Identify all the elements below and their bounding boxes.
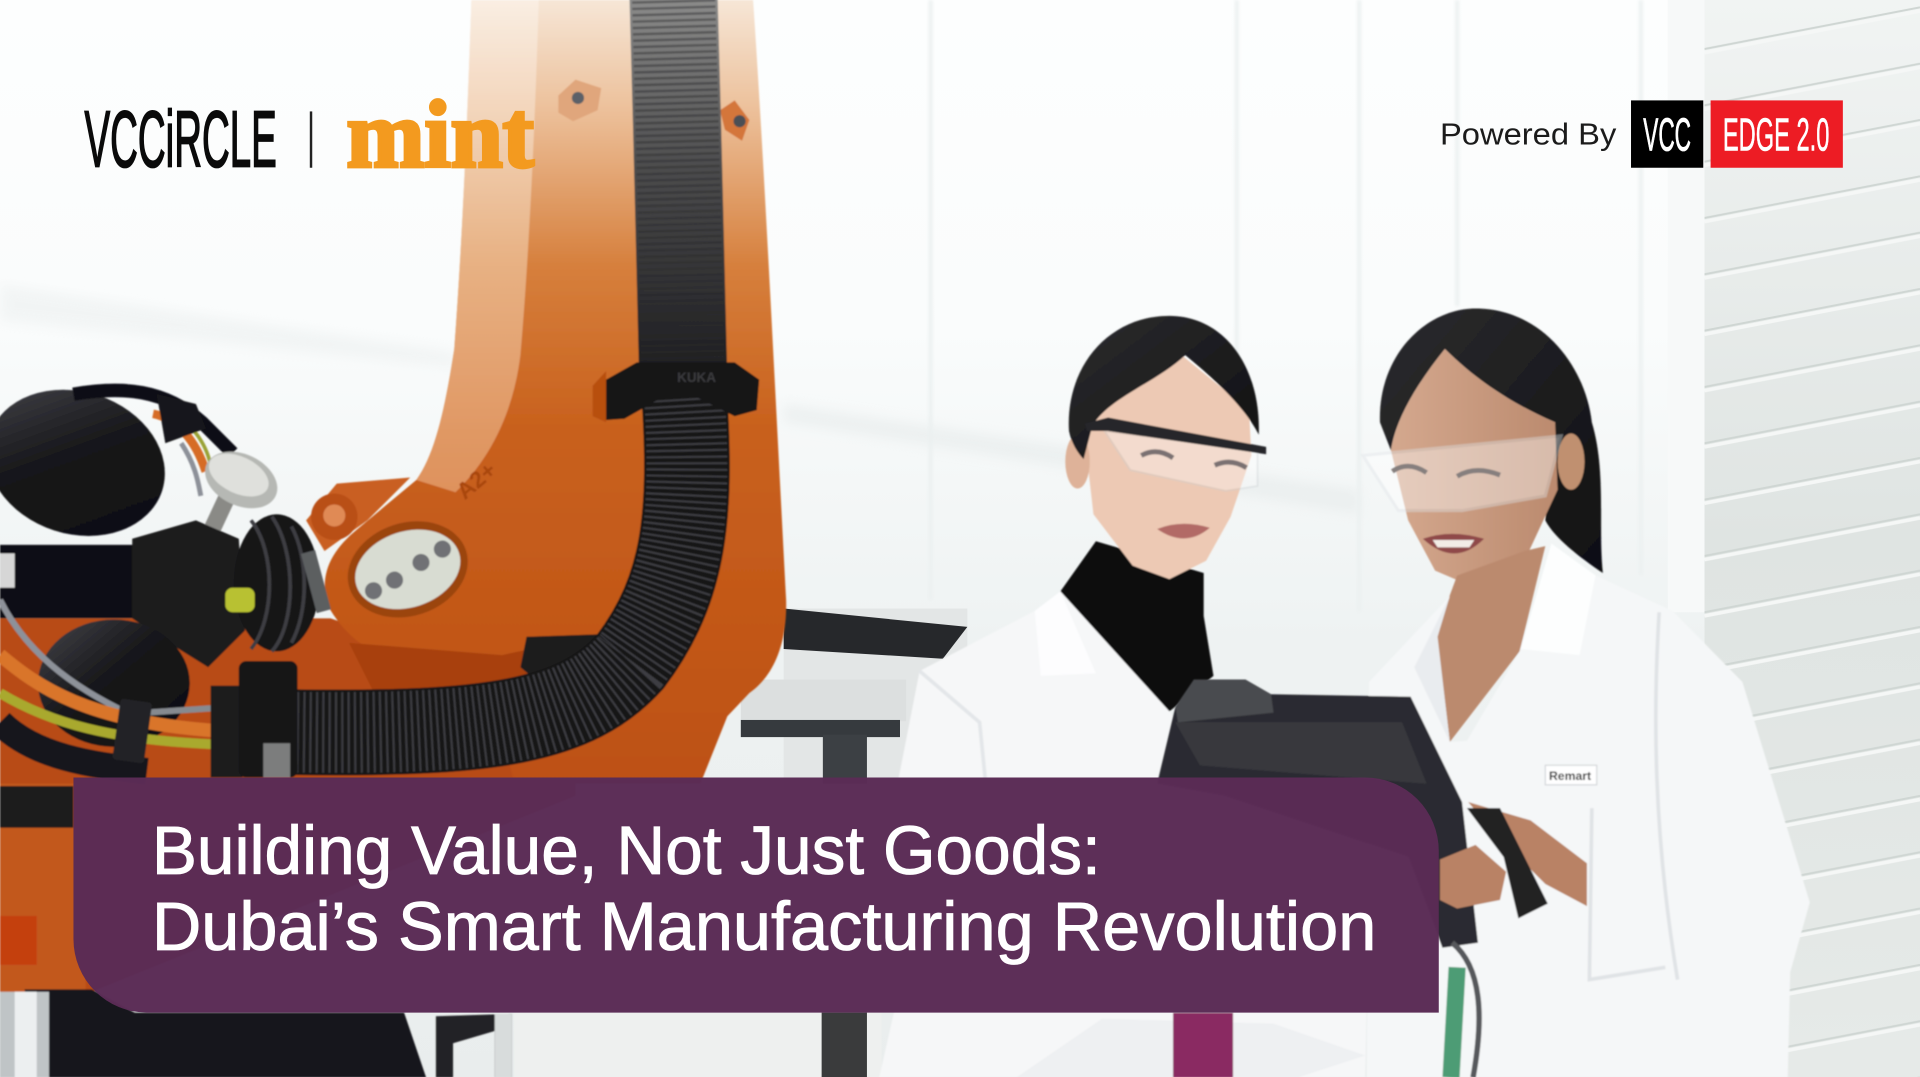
metal oval plate <box>335 506 480 633</box>
orange, yellow and grey cables <box>0 600 220 771</box>
striped pipes beside banner <box>0 786 73 828</box>
orange arm casting <box>325 0 786 784</box>
title line one: Building Value, Not Just Goods: <box>152 812 1101 889</box>
corrugated hose <box>294 0 687 732</box>
logo: VCC Edge 2.0: VCC <box>1643 109 1691 161</box>
ponytail and hair <box>1380 309 1603 573</box>
pink shirt <box>1173 1013 1233 1077</box>
right woman <box>1157 309 1810 1077</box>
title line two: Dubai’s Smart Manufacturing Revolution <box>152 888 1376 965</box>
powered by label: Powered By <box>1440 117 1617 151</box>
small side joint <box>306 478 410 551</box>
red Edge box <box>1711 100 1843 168</box>
embossed A2 mark: A2+ <box>451 457 501 504</box>
left woman <box>879 316 1371 1077</box>
robot arm <box>0 0 786 1077</box>
background: corrugated shutter door <box>1704 0 1920 1077</box>
neck and chest <box>1436 546 1545 742</box>
bundled cables <box>73 390 233 496</box>
face <box>1391 349 1558 585</box>
hose connector <box>211 661 298 778</box>
black robot base <box>0 989 512 1077</box>
robot base orange body <box>0 618 576 992</box>
cables <box>1451 943 1479 1077</box>
black VCC box <box>1631 100 1703 168</box>
safety glasses <box>1085 418 1266 491</box>
logo divider <box>310 111 312 168</box>
mounting bolts <box>558 80 749 141</box>
eyes and lips <box>1392 466 1500 553</box>
pressure gauge <box>196 441 286 536</box>
lower black tank <box>38 620 190 747</box>
dark underside <box>349 637 649 735</box>
lab coat <box>879 591 1371 1077</box>
background: dark window frame <box>514 609 967 1077</box>
hand and strap <box>1440 802 1587 918</box>
neck and face <box>1084 355 1251 579</box>
purple banner panel <box>73 778 1439 1013</box>
logo: VCC Edge 2.0 <box>1631 100 1843 168</box>
eyes and lips <box>1141 452 1247 538</box>
black pressure tank <box>0 367 184 558</box>
black turtleneck <box>1060 541 1213 711</box>
control tablet <box>1157 680 1478 948</box>
title banner <box>73 778 1439 1013</box>
hair <box>1069 316 1259 459</box>
infographic cover scene: VCCiRCLE <box>84 95 277 184</box>
safety goggles <box>1363 436 1561 511</box>
light front face of the arm <box>416 0 539 492</box>
hose clamp: KUKA <box>677 370 716 385</box>
lab coat <box>1367 544 1810 1077</box>
coat pocket tag <box>1545 765 1597 785</box>
coat pocket tag: Remart <box>1549 769 1591 783</box>
hose clamp <box>593 362 759 422</box>
logo: mint: mint <box>347 82 534 188</box>
black cylinder and bellows <box>0 514 331 667</box>
